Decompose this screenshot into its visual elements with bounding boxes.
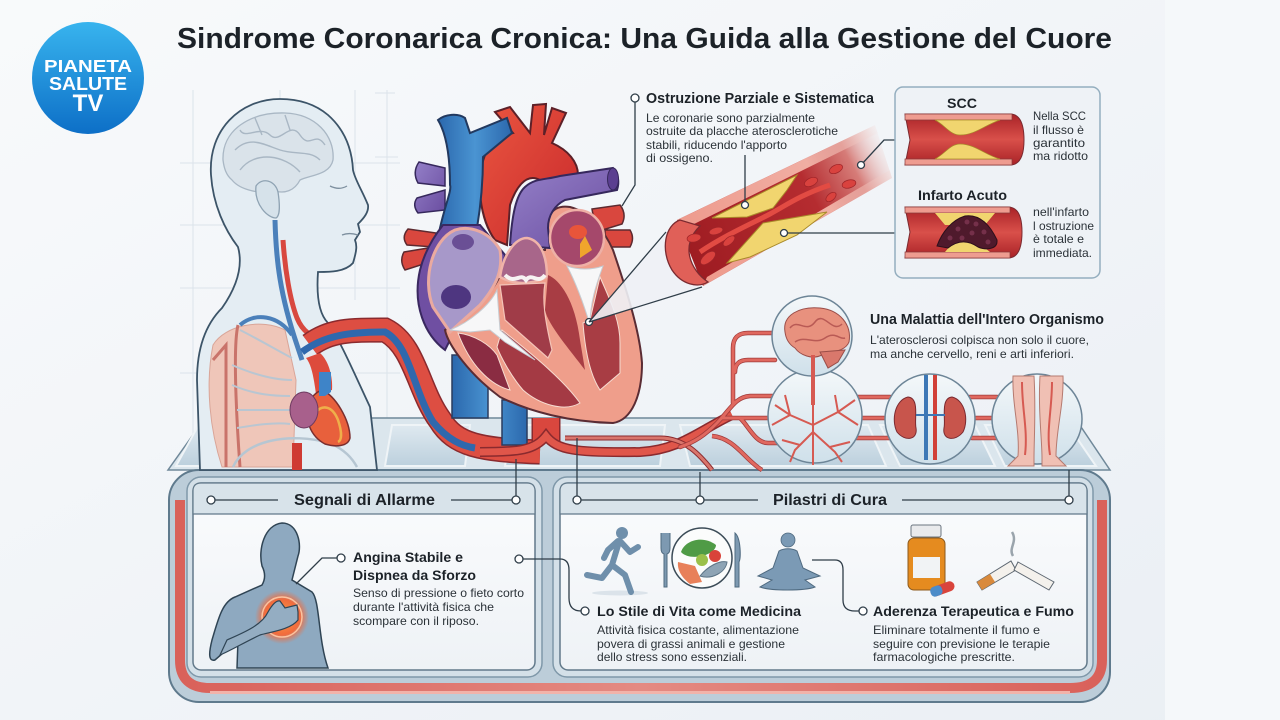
text: stable angina: scompare con il riposo. (353, 614, 479, 628)
SCC note (1033, 109, 1088, 163)
tray: lower body (169, 470, 1110, 702)
heading: warning signs: Segnali di Allarme (294, 492, 435, 509)
red arteries to organs (680, 333, 1000, 447)
panel: warning signs (187, 459, 542, 677)
pulmonary valve chamber (500, 238, 547, 283)
text block: partial obstruction: Ostruzione Parziale e Sistematica (646, 91, 875, 107)
closed eye and lips (330, 186, 358, 235)
panel: SCC vs acute infarction (895, 87, 1100, 278)
logo: Pianeta Salute TV (32, 22, 144, 134)
red aorta arch (480, 104, 578, 245)
tray: upper rim with compartments (168, 418, 1110, 470)
SCC note: ma ridotto (1033, 149, 1088, 163)
left atrium chamber (550, 210, 604, 266)
purple atrium shell (418, 225, 505, 350)
organ: kidneys circle (885, 374, 975, 464)
SCC note: Nella SCC (1033, 109, 1086, 123)
ear (256, 181, 279, 218)
text: adherence and smoking: seguire con previsione le terapie (873, 637, 1050, 651)
text: lifestyle: Lo Stile di Vita come Medicina (597, 603, 801, 619)
heading: pillars of care: Pilastri di Cura (773, 492, 887, 509)
text: stable angina: Dispnea da Sforzo (353, 567, 476, 583)
text block: partial obstruction: stabili, riducendo l'apporto (646, 138, 787, 152)
icon: pill bottle and capsule (908, 525, 956, 598)
text: lifestyle: dello stress sono essenziali. (597, 650, 747, 664)
text: stable angina: durante l'attività fisica che (353, 600, 494, 614)
small heart in chest (290, 353, 350, 446)
anatomical heart (402, 104, 642, 445)
SCC note: garantito (1033, 136, 1085, 150)
icon: meditating person (758, 533, 820, 590)
logo: Pianeta Salute TV: SALUTE (49, 74, 127, 94)
text block: partial obstruction: ostruite da placche aterosclerotiche (646, 124, 838, 138)
blue vena cava upper (438, 115, 512, 228)
text block: partial obstruction: di ossigeno. (646, 151, 713, 165)
text: adherence and smoking (873, 603, 1074, 664)
lungs (209, 324, 296, 467)
text: adherence and smoking: farmacologiche prescritte. (873, 650, 1015, 664)
Infarto note: nell'infarto (1033, 205, 1089, 219)
Infarto note (1033, 205, 1094, 260)
organ: vascular tree circle (768, 369, 862, 465)
icon: knife (735, 533, 740, 587)
logo: Pianeta Salute TV: TV (73, 90, 103, 117)
text: lifestyle: povera di grassi animali e gestione (597, 637, 785, 651)
icon: broken cigarette (977, 532, 1054, 590)
pulmonary artery purple (510, 168, 618, 248)
text: stable angina (353, 549, 524, 628)
icon: plate of healthy food (672, 528, 732, 588)
text: stable angina: Angina Stabile e (353, 549, 463, 565)
text block: partial obstruction (646, 91, 875, 165)
blue vena cava lower (452, 355, 527, 445)
lower right ventricle (458, 333, 510, 390)
aorta stem and lower arteries (480, 415, 762, 470)
SCC label: SCC (947, 95, 977, 111)
vessel: occluded by clot (905, 207, 1022, 258)
title: Sindrome Coronarica Cronica: Una Guida alla Gestione del Cuore (177, 23, 1112, 55)
left ventricle chambers (545, 275, 585, 370)
zoom cone from heart to artery (589, 232, 702, 322)
logo: Pianeta Salute TV: PIANETA (44, 56, 132, 76)
callout lines for heart and artery (589, 94, 925, 322)
organ: brain circle (772, 296, 852, 405)
central ventricle (500, 283, 552, 358)
text block: whole organism disease (870, 312, 1104, 361)
artery tube from chest to tray (302, 330, 540, 452)
text: lifestyle (597, 603, 801, 664)
red vessels right and left (402, 205, 632, 270)
text: stable angina: Senso di pressione o fieto corto (353, 586, 524, 600)
abdomen arc (233, 438, 357, 467)
text: adherence and smoking: Aderenza Terapeutica e Fumo (873, 603, 1074, 619)
panel: pillars of care (515, 438, 1093, 677)
icon: fork (661, 533, 670, 587)
icon: runner (587, 527, 648, 596)
text: lifestyle: Attività fisica costante, alimentazione (597, 623, 799, 637)
text block: partial obstruction: Le coronarie sono parzialmente (646, 111, 815, 125)
text block: whole organism disease: ma anche cervello, reni e arti inferiori. (870, 347, 1074, 361)
organ: legs circle (992, 374, 1082, 466)
Infarto note: l ostruzione (1033, 219, 1094, 233)
vessel: SCC narrowed (905, 114, 1024, 165)
inner atrium chamber (429, 228, 501, 332)
text block: whole organism disease: Una Malattia dell'Intero Organismo (870, 312, 1104, 328)
purple vessels left (415, 162, 445, 213)
callout dot on heart (586, 318, 592, 326)
neck vessels (283, 240, 325, 337)
text: adherence and smoking: Eliminare totalmente il fumo e (873, 623, 1040, 637)
zoomed artery with plaque (665, 125, 892, 286)
heart body wall (445, 207, 642, 423)
white valve chordae (450, 290, 535, 360)
blueprint grid behind figure (180, 90, 400, 470)
Infarto note: è totale e (1033, 232, 1084, 246)
Infarto note: immediata. (1033, 246, 1092, 260)
text block: whole organism disease: L'aterosclerosi colpisca non solo il cuore, (870, 333, 1089, 347)
SCC note: il flusso è (1033, 123, 1084, 137)
icon: person with chest pain (210, 523, 328, 668)
human figure with brain and lungs (197, 99, 377, 470)
Infarto label: Infarto Acuto (918, 187, 1007, 203)
